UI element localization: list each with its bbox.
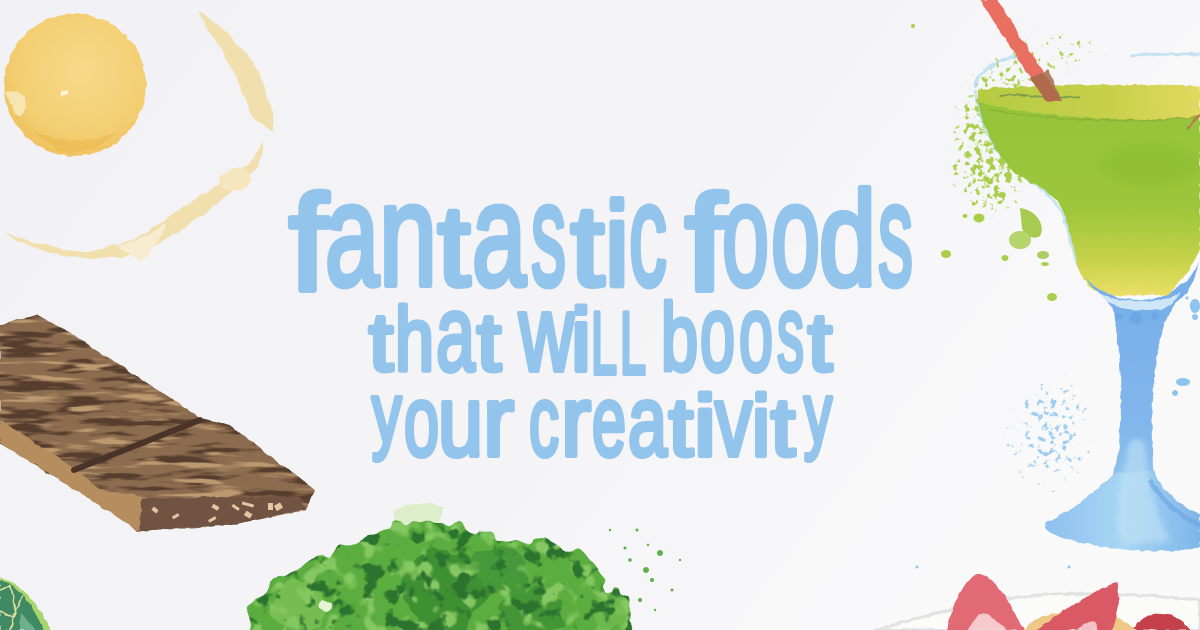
heading line 2: s (777, 272, 804, 394)
icon: broccoli (244, 504, 640, 630)
heading line 2: o (739, 272, 773, 394)
green splatter near broccoli (609, 528, 681, 611)
heading line 2: a (436, 272, 476, 394)
heading line 1: o (771, 153, 820, 316)
custard (1025, 612, 1135, 630)
drink liquid (977, 85, 1200, 296)
icon: chocolate bar (0, 314, 315, 532)
heading line 1: i (605, 178, 629, 311)
chocolate side edge (0, 420, 147, 531)
heading line 2: b (661, 284, 698, 392)
strawberries (947, 574, 1190, 630)
icon: strawberry plate (875, 574, 1200, 630)
green splatter around glass (911, 20, 1155, 301)
heading line 3: e (592, 366, 626, 478)
heading line 2: t (477, 298, 501, 388)
heading line 3: y (372, 367, 402, 462)
blue splatter around stem (916, 296, 1200, 568)
heading line 3: a (628, 366, 667, 478)
heading line 1: a (325, 153, 380, 316)
icon: leaf corner (0, 577, 50, 630)
heading line 1: f (685, 167, 726, 319)
heading line 2: i (571, 290, 591, 390)
plate (875, 593, 1200, 630)
drinking straw (980, 0, 1200, 129)
chocolate nut pieces (151, 501, 283, 523)
icon: margarita glass (975, 0, 1200, 551)
chocolate broken end (139, 497, 306, 531)
heading line 1: o (722, 153, 769, 316)
heading line 3: o (404, 366, 439, 478)
heading line 1: n (379, 153, 437, 316)
heading line 3: i (694, 378, 716, 474)
icon: coffee stain ring (3, 12, 274, 261)
heading line 2: L (620, 294, 646, 392)
broccoli highlight (318, 601, 332, 611)
heading line 3: t (771, 382, 795, 474)
heading line 2: o (700, 272, 735, 394)
icon: egg yolk watercolour circle (4, 14, 146, 156)
heading line 3: i (752, 378, 770, 474)
heading line 2: L (591, 294, 617, 392)
title: fantastic foods that will boost your creativity (289, 153, 913, 478)
glass rim outline (975, 54, 1200, 285)
heading line 3: t (669, 382, 693, 474)
heading line 1: c (629, 153, 667, 316)
heading line 2: t (369, 298, 393, 388)
heading line 3: v (715, 366, 752, 478)
heading line 1: s (531, 153, 566, 316)
heading line 1: a (472, 153, 527, 316)
heading line 3: c (529, 366, 559, 478)
heading line 1: d (819, 165, 876, 314)
chocolate groove (74, 420, 200, 470)
glass stem (1046, 262, 1200, 551)
heading line 1: t (571, 183, 604, 309)
broccoli body (244, 524, 640, 630)
heading line 3: u (438, 366, 483, 478)
heading line 2: t (808, 298, 832, 388)
heading line 2: w (518, 272, 575, 394)
heading line 1: t (438, 183, 470, 309)
broccoli pale wash (392, 504, 445, 524)
heading line 3: r (561, 366, 591, 478)
infographic canvas: s (878, 153, 913, 316)
heading line 1: f (289, 167, 328, 319)
heading line 3: r (483, 366, 514, 478)
heading line 3: y (804, 367, 832, 462)
heading line 2: h (395, 290, 434, 390)
